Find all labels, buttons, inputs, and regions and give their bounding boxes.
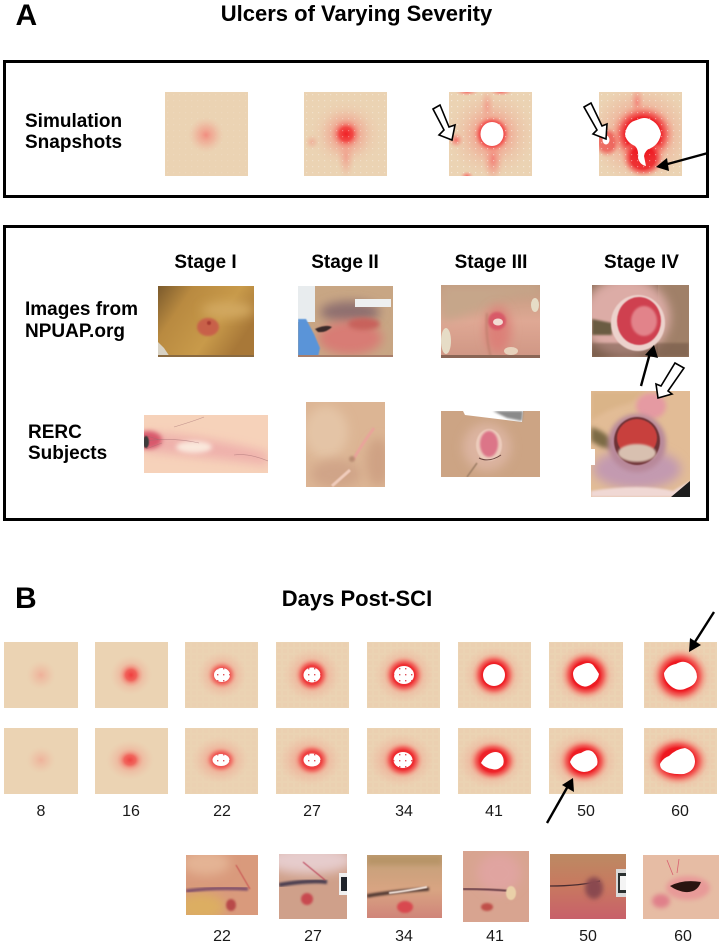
title: Ulcers of Varying Severity: Ulcers of Varying Severity xyxy=(221,1,493,26)
photo: stage II NPUAP xyxy=(298,286,393,357)
day labels: photos xyxy=(213,928,692,944)
panel: simulation snapshots xyxy=(4,62,708,196)
row 2 day 27 xyxy=(276,728,349,794)
patient photo series xyxy=(177,846,719,922)
row 1 day 60 xyxy=(644,642,717,708)
row 1 day 8 xyxy=(4,642,78,708)
simulation tile 3 xyxy=(449,92,532,176)
label: Images from NPUAP.org: NPUAP.org xyxy=(25,321,125,342)
row 1 day 41 xyxy=(458,642,531,708)
row 1 day 16 xyxy=(95,642,168,708)
heading: Stage IV: Stage IV xyxy=(604,252,679,273)
arrow: black, day 60 row 1 xyxy=(689,612,714,652)
title: Days Post-SCI: Days Post-SCI xyxy=(282,586,432,611)
photo day 27 xyxy=(279,854,347,919)
row 2 day 34 xyxy=(367,728,440,794)
row 2 day 22 xyxy=(185,728,258,794)
row 2 day 60 xyxy=(644,728,717,794)
simulation tile 1 xyxy=(165,92,248,176)
photo: stage I RERC xyxy=(144,415,268,473)
label: Simulation Snapshots: Simulation xyxy=(25,111,122,132)
row 2 day 41 xyxy=(458,728,531,794)
row 1 day 27 xyxy=(276,642,349,708)
simulation tile 2 xyxy=(304,92,387,176)
row 2 day 16 xyxy=(95,728,168,794)
day labels: simulation: 50 xyxy=(577,803,595,820)
arrow: black, tile 4 xyxy=(656,153,708,171)
row 1 day 50 xyxy=(549,642,623,708)
day labels: simulation: 8 xyxy=(37,803,46,820)
day labels: simulation: 34 xyxy=(395,803,413,820)
label: RERC Subjects: RERC xyxy=(28,422,82,443)
label: Simulation Snapshots: Snapshots xyxy=(25,132,122,153)
day labels: simulation: 60 xyxy=(671,803,689,820)
panel: clinical images xyxy=(4,226,708,520)
photo: stage III RERC xyxy=(441,411,540,477)
row 2 day 50 xyxy=(549,728,623,794)
photo: stage IV NPUAP xyxy=(592,285,689,357)
heading: Stage III: Stage III xyxy=(455,252,527,273)
arrow: open, tile 3 xyxy=(433,105,455,140)
photo day 22 xyxy=(186,855,258,915)
label: Images from NPUAP.org: Images from xyxy=(25,299,138,320)
label: RERC Subjects: Subjects xyxy=(28,443,107,464)
photo day 41 xyxy=(463,851,529,922)
row 1 day 34 xyxy=(367,642,440,708)
row 2 day 8 xyxy=(4,728,78,794)
arrow: open, tile 4 xyxy=(584,103,607,139)
day labels: simulation: 27 xyxy=(303,803,321,820)
photo: stage IV RERC xyxy=(591,391,690,497)
day labels: simulation: 41 xyxy=(485,803,503,820)
photo day 50 xyxy=(550,854,626,919)
photo: stage III NPUAP xyxy=(441,285,540,358)
photo: stage I NPUAP xyxy=(158,286,254,357)
photo day 60 xyxy=(643,855,719,919)
day labels: simulation: 16 xyxy=(122,803,140,820)
photo day 34 xyxy=(367,855,442,918)
photo: stage II RERC xyxy=(306,402,385,487)
heading: Stage II: Stage II xyxy=(311,252,379,273)
simulation time series xyxy=(4,612,717,823)
day labels: simulation xyxy=(37,803,689,820)
heading: Stage I: Stage I xyxy=(174,252,237,273)
simulation tile 4 xyxy=(599,92,682,176)
day labels: simulation: 22 xyxy=(213,803,231,820)
arrow: black, stage IV xyxy=(641,345,658,386)
arrow: black, day 50 row 2 xyxy=(547,778,574,823)
row 1 day 22 xyxy=(185,642,258,708)
arrow: open, stage IV xyxy=(656,363,684,398)
panel label: B: B xyxy=(15,582,37,615)
